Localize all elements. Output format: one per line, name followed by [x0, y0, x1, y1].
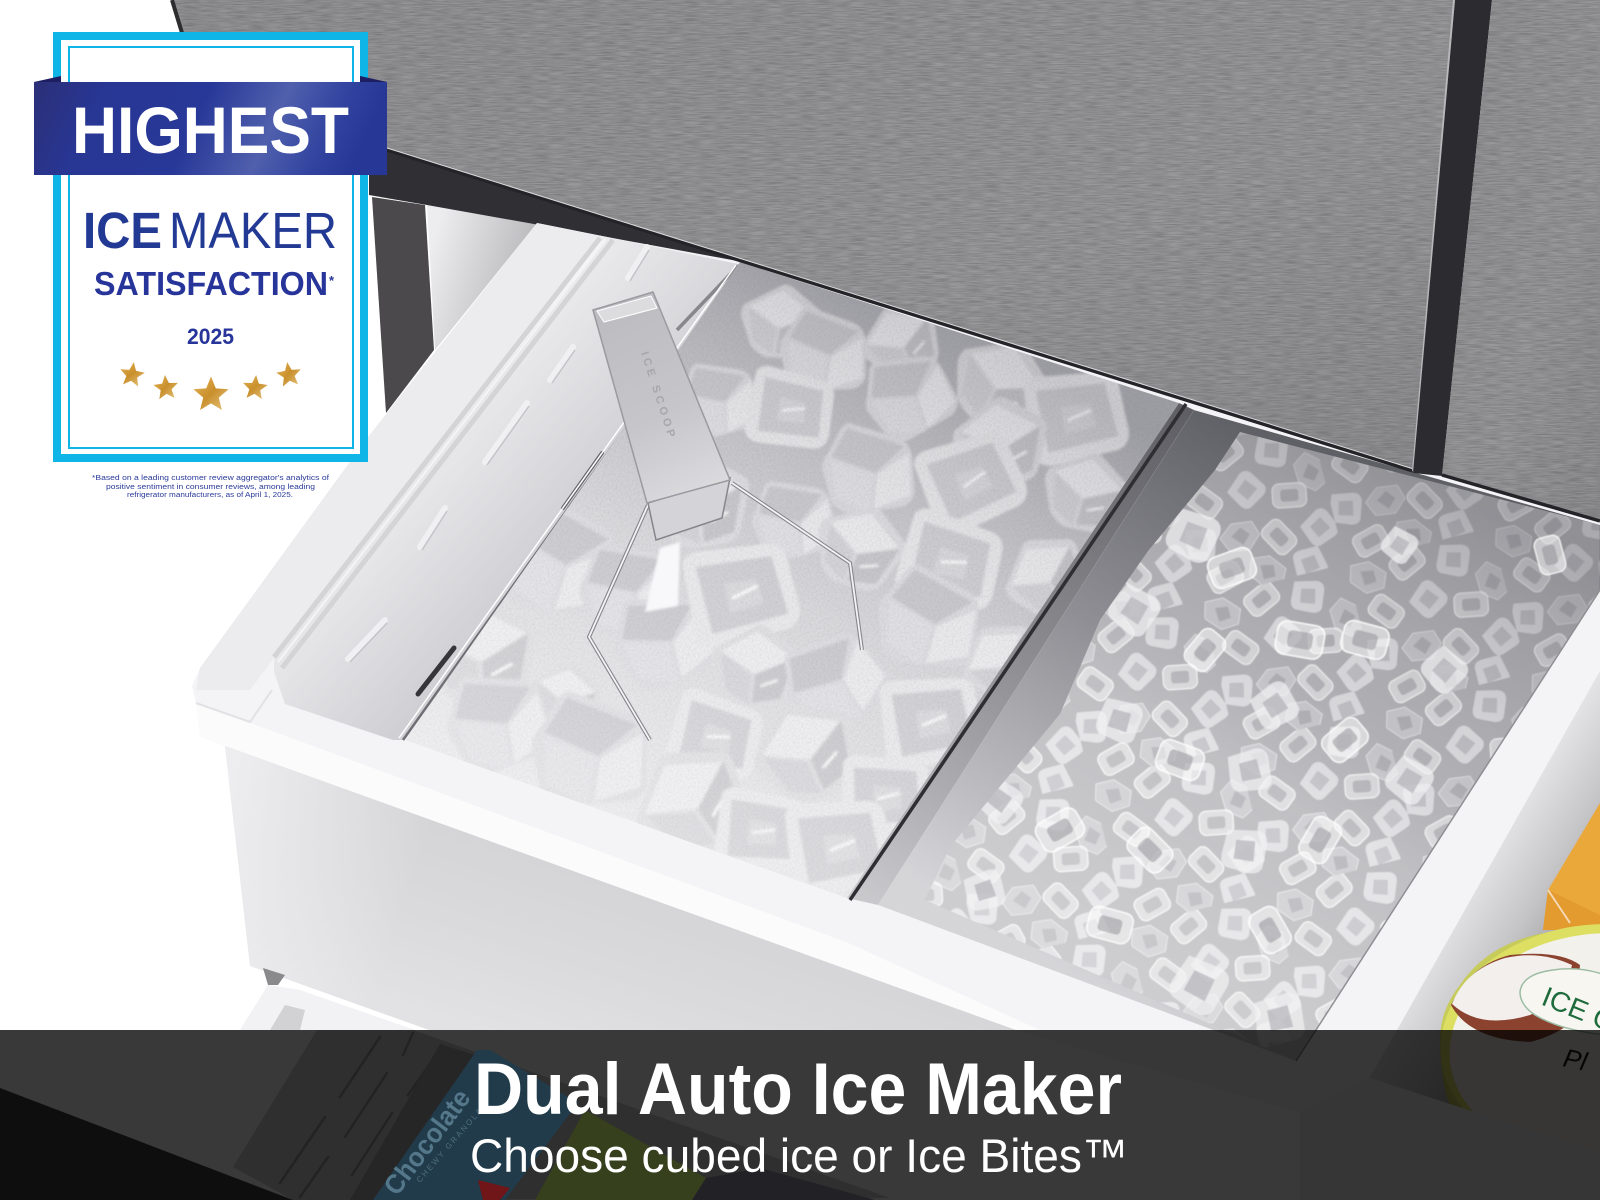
ice bites field	[929, 432, 1600, 1042]
door gap	[1413, 0, 1492, 476]
asterisk: *	[329, 273, 335, 288]
right door	[1442, 0, 1600, 521]
ice cubes	[423, 277, 1138, 900]
rim ridges	[274, 238, 613, 668]
dark slots	[418, 648, 454, 694]
drawer front face	[225, 746, 1016, 1030]
divider between bins	[847, 403, 1194, 905]
chocolate wordmark: Chocolate	[378, 1084, 476, 1200]
badge frame	[53, 32, 368, 462]
footnote: positive sentiment in consumer reviews, among leading	[106, 482, 315, 491]
right shadow zone	[1300, 671, 1600, 1200]
scoop	[589, 292, 862, 740]
ice cream tub	[1440, 924, 1600, 1153]
orange box	[1543, 803, 1600, 930]
tub label	[1519, 968, 1600, 1035]
cabinet interior wall	[369, 150, 760, 413]
year: 2025	[187, 324, 234, 349]
award badge	[34, 32, 387, 499]
ribbon heading: HIGHEST	[72, 93, 349, 167]
ICE: ICE	[83, 202, 162, 259]
title: Dual Auto Ice Maker	[474, 1049, 1122, 1130]
olive box	[535, 1110, 706, 1200]
footnote	[92, 473, 330, 499]
tub rim	[1440, 930, 1600, 1170]
drawer ribs	[280, 1033, 440, 1197]
lower drawer edge	[240, 968, 415, 1030]
scoop embossed label: ICE SCOOP	[638, 350, 678, 442]
red chevron	[478, 1180, 510, 1200]
scoop throat	[648, 478, 730, 540]
right bin: ice bites	[878, 410, 1600, 1080]
drawer rim and lip	[192, 223, 1600, 1200]
black base shadow	[0, 1088, 293, 1200]
drawer left wall	[274, 237, 747, 740]
footnote: refrigerator manufacturers, as of April 1, 2025.	[127, 490, 293, 499]
granola line: CHEWY GRANOLA	[415, 1105, 485, 1184]
left door	[172, 0, 1454, 471]
dark lower box	[692, 1168, 875, 1200]
handle recess	[677, 267, 747, 377]
ribbon	[34, 76, 387, 175]
dark gap beside box	[350, 1044, 490, 1200]
tub script: Pl	[1561, 1043, 1591, 1077]
scoop blade outline	[589, 483, 862, 740]
scoop handle	[593, 292, 730, 503]
footnote: *Based on a leading customer review aggregator's analytics of	[92, 473, 330, 482]
coconut illustration	[1451, 954, 1580, 1042]
lower drawer interior	[233, 1030, 890, 1200]
subtitle: Choose cubed ice or Ice Bites™	[470, 1129, 1128, 1182]
SATISFACTION: SATISFACTION	[94, 265, 328, 302]
MAKER: MAKER	[169, 202, 337, 259]
bin edge	[403, 267, 740, 740]
drawer front panel right	[1300, 1077, 1600, 1200]
lower drawer contents seen through band	[0, 1030, 890, 1200]
chocolate box	[373, 1050, 578, 1200]
left bin: cubed ice	[405, 262, 1179, 900]
liner slots	[348, 247, 647, 659]
five gold stars	[118, 360, 303, 410]
caption band	[0, 1030, 1600, 1200]
